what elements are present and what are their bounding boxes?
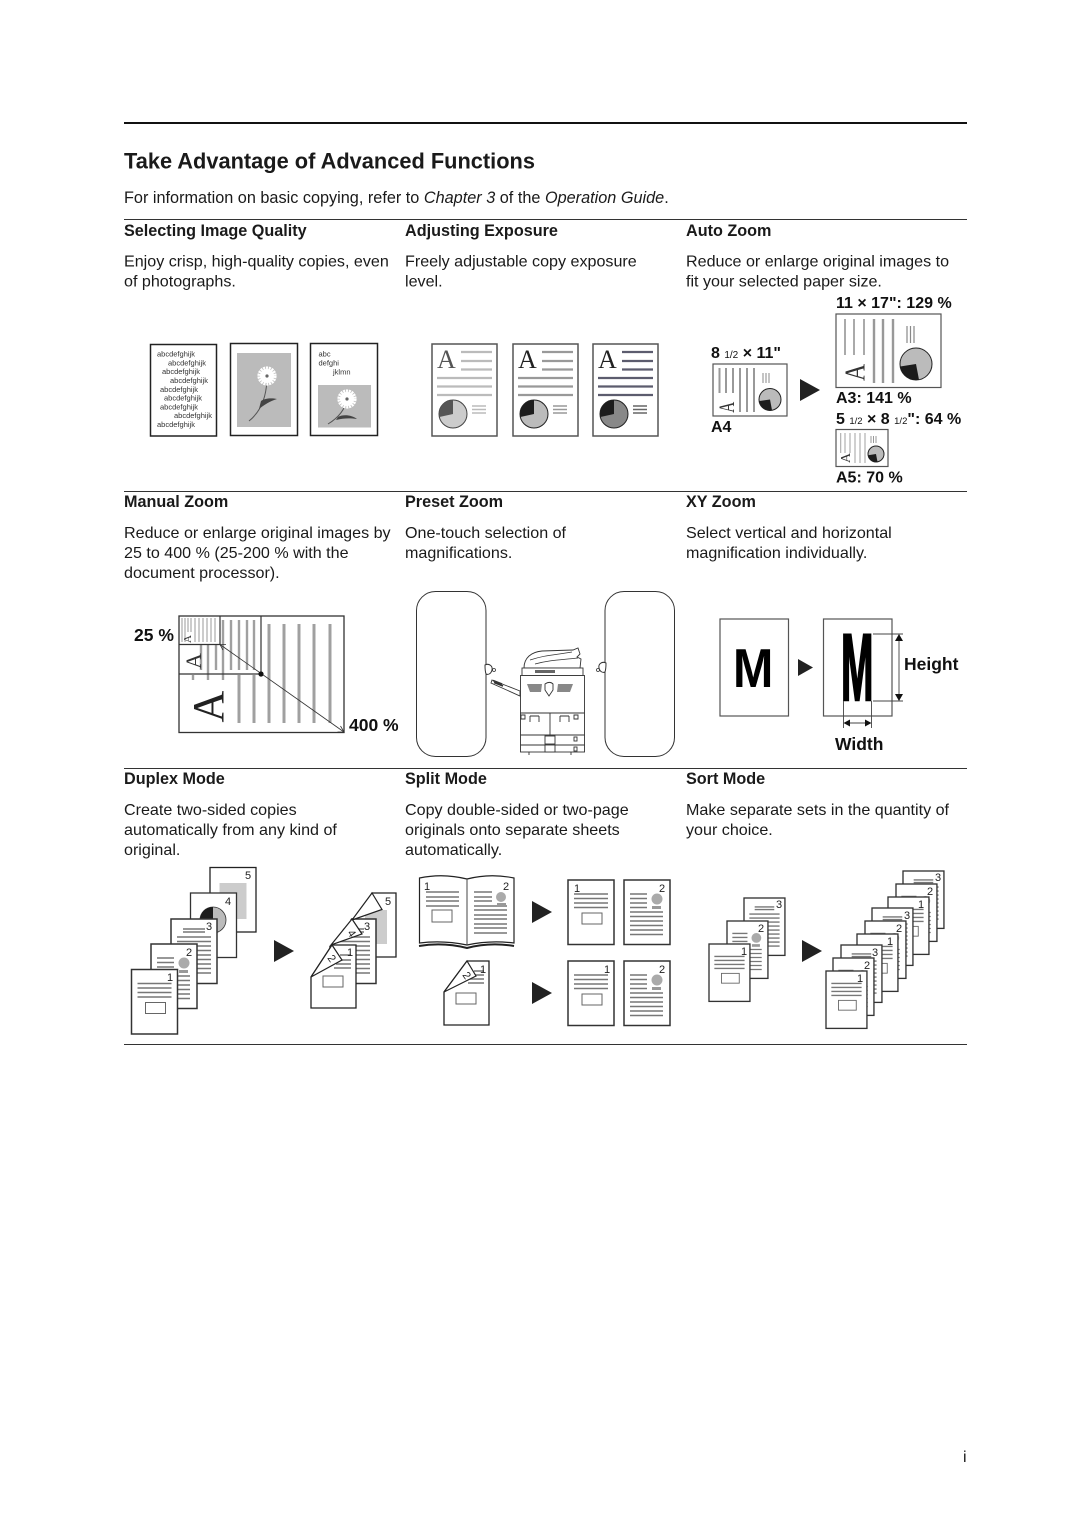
label: A4: A4	[711, 419, 732, 436]
icon: split page 1: 1	[604, 964, 610, 976]
divider 4	[124, 1044, 967, 1045]
icon: text page	[150, 344, 216, 436]
icon: duplex result: 4	[345, 928, 358, 940]
divider 3	[124, 768, 967, 769]
icon: split page 2: 2	[659, 883, 665, 895]
callout: left bubble	[416, 592, 496, 756]
arrow	[532, 901, 552, 923]
description: Reduce or enlarge original images to	[686, 252, 949, 270]
description: level.	[405, 272, 443, 290]
icon: sorted sets: 3	[904, 910, 910, 922]
icon: text page: abcdefghijk	[160, 385, 198, 394]
arrow	[800, 379, 820, 401]
description: One-touch selection of	[405, 524, 567, 542]
icon: stretched page	[824, 615, 892, 721]
icon: A3 page: A	[838, 364, 871, 381]
description: Freely adjustable copy exposure	[405, 252, 637, 270]
panel: preset zoom	[405, 493, 674, 756]
icon: duplex result: 2	[325, 953, 338, 965]
icon: source page stack: 3	[206, 921, 212, 933]
icon: source page stack: 4	[225, 896, 231, 908]
label: ledger zoom: 11 × 17": 129 %	[836, 295, 952, 312]
icon: source page stack: 1	[167, 972, 173, 984]
heading: Adjusting Exposure	[405, 222, 558, 240]
icon: source page stack	[132, 868, 256, 1034]
description: Select vertical and horizontal	[686, 524, 892, 542]
label: height: Height	[904, 654, 959, 674]
icon: duplex result: 1	[347, 947, 353, 959]
icon: text page: abcdefghijk	[157, 350, 195, 358]
description: your choice.	[686, 821, 773, 839]
heading: XY Zoom	[686, 493, 756, 511]
description: 25 to 400 % (25-200 % with the	[124, 544, 349, 562]
icon: light exposure page: A	[437, 345, 456, 374]
description: Copy double-sided or two-page	[405, 801, 629, 819]
description: automatically.	[405, 841, 502, 859]
icon: mixed page: jklmn	[332, 368, 351, 376]
icon: duplex result	[311, 893, 396, 1008]
heading: Sort Mode	[686, 770, 765, 788]
description: Create two-sided copies	[124, 801, 297, 819]
icon: open book: 1	[424, 881, 430, 893]
icon: sorted sets: 2	[896, 923, 902, 935]
panel: split mode	[405, 770, 670, 1026]
icon: original set: 1	[741, 946, 747, 958]
heading: Auto Zoom	[686, 222, 771, 240]
icon: A3 page	[836, 314, 941, 388]
title: Take Advantage of Advanced Functions	[124, 148, 535, 174]
heading: Manual Zoom	[124, 493, 228, 511]
arrow	[274, 940, 294, 962]
dimension: width	[844, 701, 872, 728]
icon: A4 page	[713, 364, 787, 416]
arrow	[798, 659, 813, 676]
icon: light exposure page	[432, 344, 497, 436]
icon: text page: abcdefghijk	[157, 420, 195, 429]
icon: split page 1	[568, 880, 614, 944]
icon: sorted sets: 1	[918, 899, 924, 911]
icon: text page: abcdefghijk	[162, 367, 200, 376]
panel: manual zoom	[124, 493, 399, 735]
description: document processor).	[124, 564, 280, 582]
heading: Duplex Mode	[124, 770, 225, 788]
description: Reduce or enlarge original images by	[124, 524, 392, 542]
icon: stretched page: M	[841, 615, 873, 721]
icon: original set	[709, 898, 785, 1001]
dimension: height	[873, 634, 903, 701]
icon: text page: abcdefghijk	[164, 394, 202, 402]
label: 400 percent: 400 %	[349, 715, 399, 735]
heading: Selecting Image Quality	[124, 222, 307, 240]
description: fit your selected paper size.	[686, 272, 882, 290]
icon: text page: abcdefghijk	[174, 411, 212, 420]
description: of photographs.	[124, 272, 236, 290]
icon: original page: M	[733, 637, 773, 699]
icon: text page: abcdefghijk	[170, 376, 208, 385]
description: magnification individually.	[686, 544, 867, 562]
icon: A5 page	[836, 430, 888, 466]
label: A3: A3: 141 %	[836, 390, 912, 407]
panel: duplex mode	[124, 770, 396, 1034]
icon: split page 2: 2	[659, 964, 665, 976]
description: Enjoy crisp, high-quality copies, even	[124, 252, 389, 270]
icon: duplex result: 5	[385, 896, 391, 908]
icon: sorted sets: 1	[887, 936, 893, 948]
chart: nested zoom pages	[179, 616, 344, 732]
chart: nested zoom pages: A	[182, 635, 194, 643]
icon: split page 2	[624, 961, 670, 1026]
icon: duplex result: 3	[364, 921, 370, 933]
panel: auto zoom	[686, 222, 961, 486]
icon: photo page	[230, 344, 298, 436]
icon: mixed page: defghi	[318, 358, 339, 367]
icon: sorted sets: 2	[927, 886, 933, 898]
label: letter size: 8 1/2 × 11"	[711, 345, 781, 362]
icon: original page	[720, 619, 788, 716]
icon: split page 1	[568, 961, 614, 1026]
chart: nested zoom pages: A	[184, 690, 233, 722]
callout: right bubble	[596, 592, 674, 756]
icon: text page: abcdefghijk	[168, 358, 206, 367]
icon: sorted sets: 2	[864, 960, 870, 972]
divider 1	[124, 219, 967, 220]
panel: adjusting exposure	[405, 222, 658, 436]
description: original.	[124, 841, 180, 859]
icon: sorted sets: 3	[872, 947, 878, 959]
description: originals onto separate sheets	[405, 821, 620, 839]
icon: dark exposure page: A	[598, 345, 617, 374]
label: width: Width	[835, 734, 883, 754]
icon: sorted sets: 1	[857, 973, 863, 985]
page number: i	[963, 1449, 967, 1466]
icon: A5 page: A	[839, 452, 854, 463]
icon: sorted sets: 3	[935, 872, 941, 884]
icon: mixed page	[310, 344, 378, 436]
icon: original set: 3	[776, 899, 782, 911]
icon: source page stack: 5	[245, 870, 251, 882]
arrow	[532, 982, 552, 1004]
description: Make separate sets in the quantity of	[686, 801, 950, 819]
top rule	[124, 122, 967, 124]
panel: selecting image quality	[124, 222, 389, 436]
icon: dark exposure page	[593, 344, 658, 436]
panel: sort mode	[686, 770, 950, 1028]
icon: two-sided original: 2	[460, 970, 473, 982]
description: magnifications.	[405, 544, 512, 562]
icon: two-sided original	[444, 961, 489, 1025]
arrow	[802, 940, 822, 962]
icon: medium exposure page	[513, 344, 578, 436]
heading: Preset Zoom	[405, 493, 503, 511]
divider 2	[124, 491, 967, 492]
icon: open book	[419, 876, 514, 948]
intro text: For information on basic copying, refer to Chapter 3 of the Operation Guide.	[124, 189, 669, 207]
icon: two-sided original: 1	[480, 964, 486, 976]
chart: nested zoom pages: A	[181, 653, 206, 669]
label: A5: A5: 70 %	[836, 470, 903, 486]
icon: A4 page: A	[715, 401, 740, 413]
icon: copier machine	[491, 648, 584, 755]
label: 25 percent: 25 %	[134, 625, 174, 645]
icon: mixed page: abc	[318, 350, 331, 358]
icon: open book: 2	[503, 881, 509, 893]
label: statement zoom: 5 1/2 × 8 1/2": 64 %	[836, 411, 961, 428]
description: automatically from any kind of	[124, 821, 337, 839]
icon: sorted sets	[826, 871, 944, 1028]
panel: xy zoom	[686, 493, 959, 754]
icon: medium exposure page: A	[518, 345, 537, 374]
icon: split page 1: 1	[574, 883, 580, 895]
icon: source page stack: 2	[186, 947, 192, 959]
icon: original set: 2	[758, 923, 764, 935]
icon: split page 2	[624, 880, 670, 944]
heading: Split Mode	[405, 770, 487, 788]
icon: text page: abcdefghijk	[160, 402, 198, 411]
